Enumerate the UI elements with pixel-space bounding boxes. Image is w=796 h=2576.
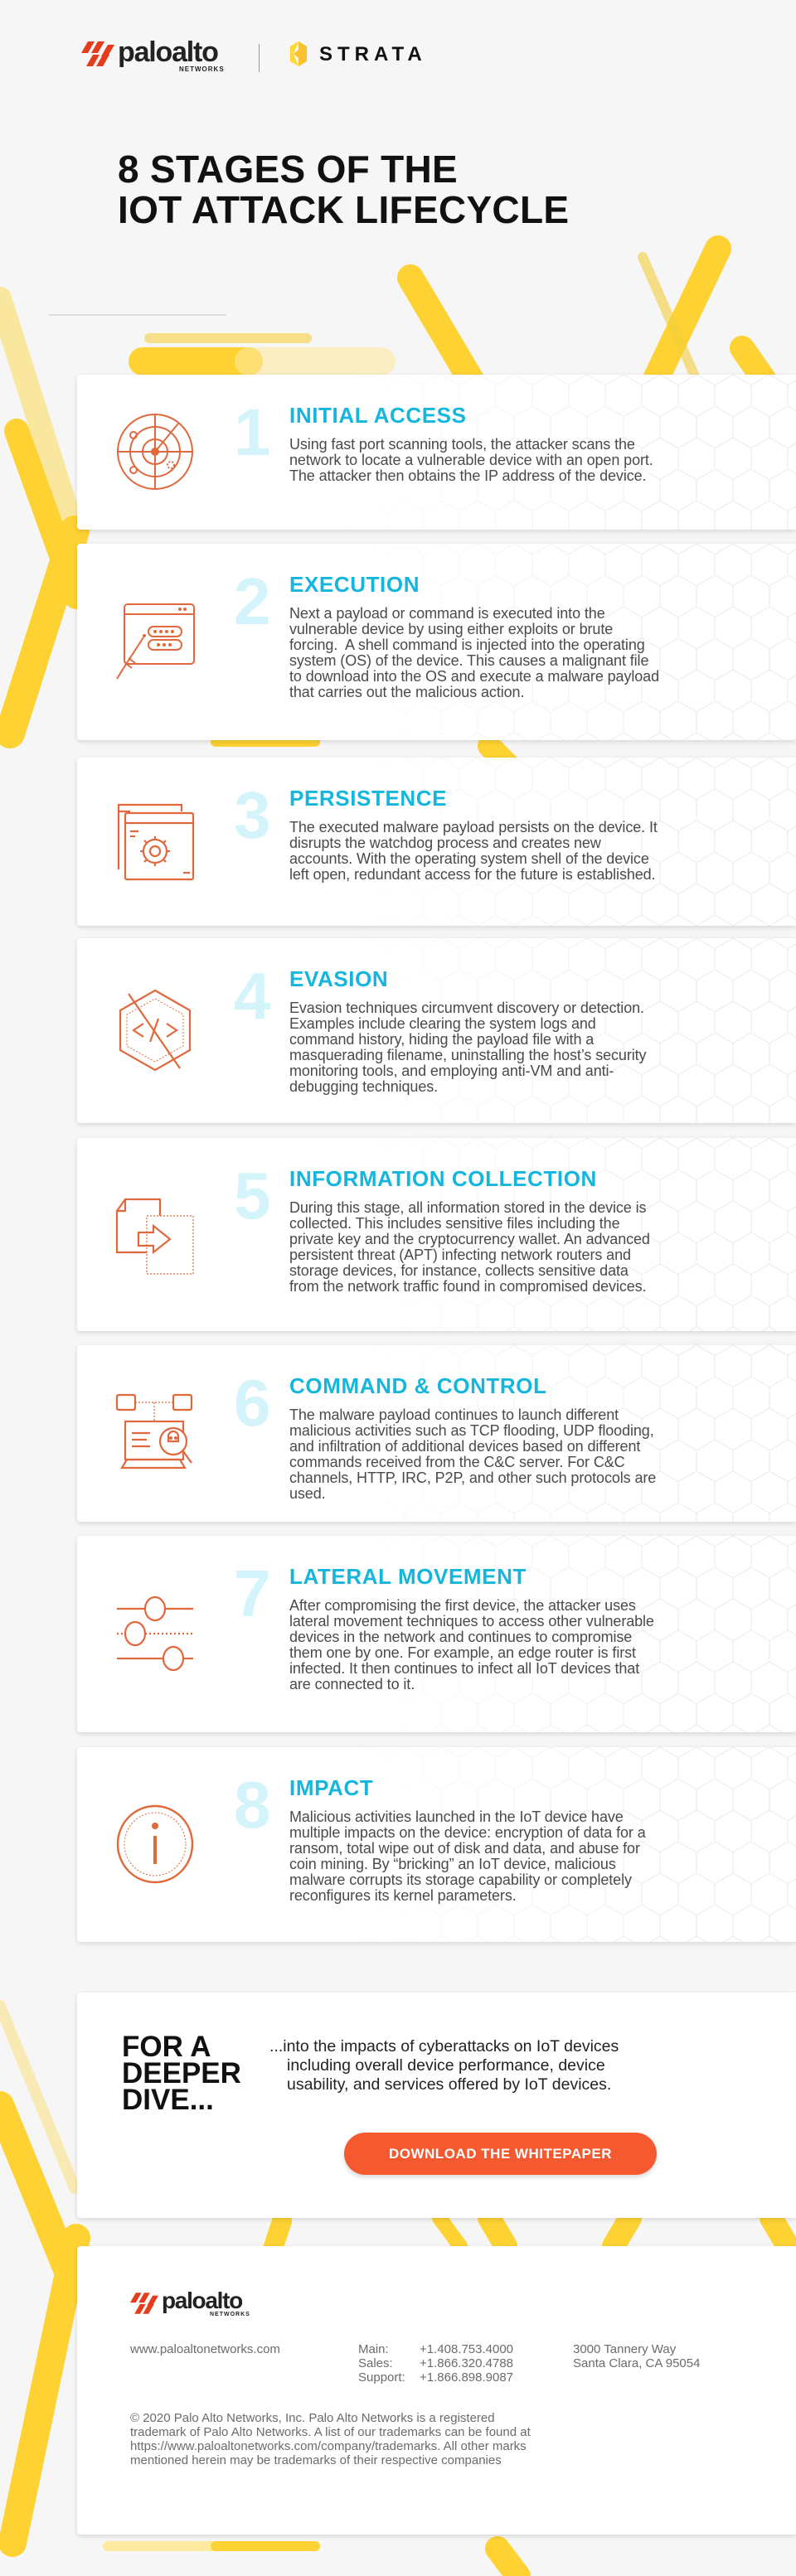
- icon: windows with gear: [118, 804, 194, 880]
- icon: strata: [290, 41, 307, 66]
- body text: [289, 1000, 647, 1095]
- title: [118, 148, 569, 231]
- header logos: [81, 36, 427, 73]
- body text: them one by one. For example, an edge router is first: [289, 1644, 636, 1661]
- heading: EVASION: [289, 966, 388, 991]
- body text: and infiltration of additional devices based on different: [289, 1438, 640, 1455]
- cta text: including overall device performance, device: [287, 2056, 605, 2075]
- icon: hexagon code slash: [119, 990, 191, 1071]
- body text: storage devices, for instance, collects sensitive data: [289, 1262, 629, 1279]
- body text: Malicious activities launched in the IoT device have: [289, 1809, 624, 1825]
- cta heading: DEEPER: [122, 2057, 241, 2089]
- panel: footer: [77, 2246, 796, 2535]
- panel: stage 1: [77, 375, 796, 530]
- heading: EXECUTION: [289, 572, 420, 597]
- panel: stage 2: [77, 544, 796, 740]
- body text: Using fast port scanning tools, the attacker scans the: [289, 436, 635, 453]
- heading: PERSISTENCE: [289, 786, 447, 811]
- footer logo: [130, 2288, 250, 2317]
- heading: COMMAND & CONTROL: [289, 1373, 547, 1398]
- number 3: 3: [234, 778, 270, 852]
- body text: used.: [289, 1485, 326, 1502]
- footer address: Santa Clara, CA 95054: [573, 2356, 700, 2370]
- body text: channels, HTTP, IRC, P2P, and other such protocols are: [289, 1470, 656, 1486]
- body text: debugging techniques.: [289, 1078, 438, 1095]
- cta heading: FOR A: [122, 2031, 211, 2063]
- panel: stage 6: [77, 1345, 796, 1522]
- body text: commands received from the C&C server. For C&C: [289, 1454, 625, 1470]
- button: download: DOWNLOAD THE WHITEPAPER: [389, 2146, 612, 2162]
- panel: stage 3: [77, 758, 796, 926]
- body text: malware corrupts its storage capability or completely: [289, 1871, 632, 1888]
- number 4: 4: [234, 959, 270, 1033]
- body text: left open, redundant access for the future is established.: [289, 866, 655, 883]
- footer logo: NETWORKS: [210, 2312, 250, 2317]
- body text: During this stage, all information stored in the device is: [289, 1199, 646, 1216]
- number 8: 8: [234, 1768, 270, 1842]
- number 6: 6: [234, 1366, 270, 1440]
- body text: [289, 1199, 650, 1295]
- body text: Next a payload or command is executed into the: [289, 605, 605, 622]
- number 7: 7: [234, 1557, 270, 1630]
- body text: network to locate a vulnerable device with an open port.: [289, 452, 653, 468]
- panel: stage 7: [77, 1536, 796, 1732]
- footer address: [573, 2342, 700, 2370]
- body text: vulnerable device by using either exploits or brute: [289, 621, 613, 637]
- panel: footer: +1.408.753.4000: [420, 2342, 513, 2356]
- body text: collected. This includes sensitive files including the: [289, 1215, 619, 1232]
- body text: ransom, total wipe out of disk and data, and abuse for: [289, 1840, 640, 1857]
- footer phones: Main:: [358, 2342, 389, 2356]
- number 2: 2: [234, 564, 270, 638]
- footer phones: Sales:: [358, 2356, 393, 2370]
- body text: that carries out the malicious action.: [289, 684, 524, 700]
- icon: sliders: [117, 1596, 193, 1671]
- footer copyright: © 2020 Palo Alto Networks, Inc. Palo Alto Networks is a registered: [130, 2411, 495, 2425]
- cta heading: [122, 2031, 241, 2116]
- number 5: 5: [234, 1159, 270, 1232]
- panel: call to action: [77, 1993, 796, 2218]
- body text: After compromising the first device, the attacker uses: [289, 1597, 636, 1614]
- paloalto wordmark: paloalto: [118, 36, 218, 68]
- panel: stage 5: [77, 1138, 796, 1331]
- footer logo: paloalto: [162, 2288, 242, 2313]
- body text: system (OS) of the device. This causes a malignant file: [289, 652, 648, 669]
- body text: coin mining. By “bricking” an IoT device, malicious: [289, 1856, 616, 1872]
- footer website: www.paloaltonetworks.com: [130, 2342, 280, 2356]
- heading: IMPACT: [289, 1775, 373, 1800]
- body text: monitoring tools, and employing anti-VM and anti-: [289, 1063, 614, 1079]
- footer copyright: trademark of Palo Alto Networks. A list of our trademarks can be found at: [130, 2425, 531, 2439]
- heading: LATERAL MOVEMENT: [289, 1564, 527, 1589]
- footer address: 3000 Tannery Way: [573, 2342, 676, 2356]
- body text: multiple impacts on the device: encryption of data for a: [289, 1824, 646, 1841]
- cta text: [269, 2037, 619, 2094]
- body text: private key and the cryptocurrency wallet. An advanced: [289, 1231, 650, 1247]
- panel: stage 4: [77, 938, 796, 1123]
- body text: devices in the network and continues to compromise: [289, 1629, 632, 1645]
- body text: [289, 1597, 654, 1692]
- body text: Examples include clearing the system logs and: [289, 1015, 596, 1032]
- panel: stage 8: [77, 1747, 796, 1942]
- body text: malicious activities such as TCP flooding, UDP flooding,: [289, 1422, 654, 1439]
- body text: to download into the OS and execute a malware payload: [289, 668, 659, 685]
- cta text: ...into the impacts of cyberattacks on IoT devices: [269, 2037, 619, 2055]
- strata wordmark: STRATA: [319, 43, 427, 65]
- body text: infected. It then continues to infect all IoT devices that: [289, 1660, 639, 1677]
- body text: from the network traffic found in compromised devices.: [289, 1278, 646, 1295]
- icon: file transfer: [116, 1198, 194, 1275]
- body text: lateral movement techniques to access other vulnerable: [289, 1613, 654, 1629]
- icon: paloalto slashes: [81, 41, 114, 66]
- body text: Evasion techniques circumvent discovery or detection.: [289, 1000, 644, 1016]
- body text: [289, 1407, 656, 1502]
- body text: masquerading filename, uninstalling the host’s security: [289, 1047, 646, 1063]
- body text: reconfigures its kernel parameters.: [289, 1887, 517, 1904]
- icon: computer with skull: [116, 1394, 192, 1469]
- body text: persistent threat (APT) infecting network routers and: [289, 1247, 631, 1263]
- heading: INITIAL ACCESS: [289, 403, 467, 428]
- body text: The malware payload continues to launch different: [289, 1407, 619, 1423]
- body text: are connected to it.: [289, 1676, 415, 1692]
- body text: [289, 819, 658, 883]
- footer phones: Support:: [358, 2370, 405, 2385]
- body text: [289, 605, 659, 700]
- header logos: NETWORKS: [179, 65, 225, 73]
- cta heading: DIVE...: [122, 2084, 214, 2116]
- title: IOT ATTACK LIFECYCLE: [118, 188, 569, 231]
- body text: [289, 436, 653, 484]
- icon: radar: [117, 414, 193, 490]
- footer phones: [358, 2342, 405, 2385]
- panel: footer: +1.866.320.4788: [420, 2356, 513, 2370]
- icon: info circle: [116, 1805, 194, 1883]
- cta text: usability, and services offered by IoT devices.: [287, 2075, 611, 2094]
- heading: INFORMATION COLLECTION: [289, 1166, 597, 1191]
- button: download: [344, 2133, 657, 2175]
- panel: footer: +1.866.898.9087: [420, 2370, 513, 2385]
- body text: The executed malware payload persists on the device. It: [289, 819, 658, 835]
- body text: The attacker then obtains the IP address of the device.: [289, 467, 646, 484]
- footer copyright: [130, 2411, 531, 2467]
- body text: disrupts the watchdog process and creates new: [289, 835, 601, 851]
- body text: forcing. A shell command is injected into the operating: [289, 637, 645, 653]
- number 1: 1: [234, 395, 270, 469]
- body text: command history, hiding the payload file with a: [289, 1031, 594, 1048]
- icon: browser with syringe: [116, 603, 195, 680]
- body text: accounts. With the operating system shell of the device: [289, 850, 649, 867]
- title: 8 STAGES OF THE: [118, 148, 458, 191]
- body text: [289, 1809, 646, 1904]
- footer copyright: https://www.paloaltonetworks.com/company/trademarks. All other marks: [130, 2439, 527, 2453]
- footer copyright: mentioned herein may be trademarks of their respective companies: [130, 2453, 502, 2467]
